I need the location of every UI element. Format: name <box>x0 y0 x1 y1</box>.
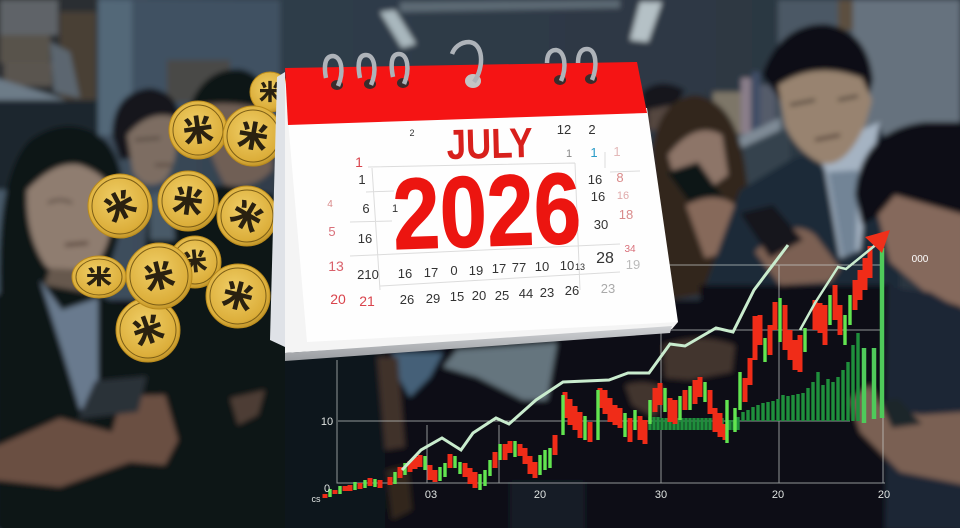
coin <box>250 72 290 112</box>
calendar dates: 10 <box>560 258 574 273</box>
calendar dates: 17 <box>424 265 438 280</box>
left shelves <box>0 0 100 190</box>
coin: 米 <box>95 178 143 231</box>
calendar dates: 15 <box>450 289 464 304</box>
secondary trend line <box>800 243 878 330</box>
chart: candlestick price chart <box>312 230 929 504</box>
axis labels: 20 <box>534 489 546 501</box>
coin <box>169 236 221 288</box>
lower page <box>285 80 678 353</box>
axis labels: 10 <box>321 416 333 428</box>
calendar dates: 16 <box>617 190 629 202</box>
axis labels: 20 <box>772 489 784 501</box>
calendar dates: 30 <box>594 217 608 232</box>
coin <box>72 256 126 298</box>
coin <box>223 106 283 166</box>
desk calendar <box>270 42 678 361</box>
wall box <box>167 60 230 102</box>
coin <box>169 101 227 159</box>
calendar dates: 21 <box>359 293 375 309</box>
calendar dates: 1 <box>590 145 598 160</box>
coin: 米 <box>139 249 178 299</box>
calendar dates: 1 <box>355 154 363 170</box>
axis labels: 0 <box>324 483 330 495</box>
centre hands <box>663 338 735 380</box>
person: back woman <box>112 88 181 184</box>
coin: 米 <box>180 104 216 152</box>
person: right man <box>700 24 900 528</box>
ceiling lights <box>380 10 416 48</box>
calendar dates: 13 <box>328 258 344 274</box>
calendar dates <box>327 122 640 309</box>
calendar dates: 1 <box>392 203 398 215</box>
coin: 米 <box>86 261 112 290</box>
calendar dates: 16 <box>358 231 372 246</box>
calendar dates: 20 <box>330 291 346 307</box>
calendar dates: 13 <box>575 262 585 272</box>
bookshelf <box>713 72 790 190</box>
calendar dates: 34 <box>624 244 636 255</box>
faint calendar grid <box>350 152 640 290</box>
calendar dates: 1 <box>358 172 366 187</box>
calendar dates: 26 <box>400 292 414 307</box>
coin <box>116 298 180 362</box>
calendar dates: 1 <box>613 144 621 159</box>
page stack edge <box>285 326 672 361</box>
calendar dates: 16 <box>398 266 412 281</box>
back wall left <box>98 0 280 135</box>
calendar dates: 44 <box>519 286 533 301</box>
calendar dates: 17 <box>492 261 506 276</box>
coin: 米 <box>181 241 209 278</box>
hands <box>0 395 178 487</box>
back page strip <box>270 72 285 347</box>
coin <box>206 264 270 328</box>
dark lower crowd <box>0 300 960 528</box>
axis labels: 000 <box>912 254 929 265</box>
coin: 米 <box>170 175 206 223</box>
green candles <box>330 295 850 497</box>
tall bright green bars <box>864 248 882 423</box>
calendar dates: 12 <box>557 122 571 137</box>
suit <box>0 285 200 528</box>
red candles <box>325 246 870 498</box>
coin: 米 <box>259 75 281 107</box>
calendar dates: 28 <box>596 250 614 267</box>
person: long-hair woman <box>642 83 750 300</box>
calendar dates: 20 <box>472 288 486 303</box>
calendar dates: 6 <box>362 201 370 216</box>
calendar dates: 0 <box>450 263 458 278</box>
green volume bars <box>650 333 858 430</box>
axis labels: cs <box>312 494 321 504</box>
calendar dates: 19 <box>469 263 483 278</box>
calendar dates: 23 <box>540 285 554 300</box>
price trend line <box>402 245 788 470</box>
gold coins <box>72 72 290 362</box>
axis labels <box>312 254 929 504</box>
calendar dates: 26 <box>565 283 579 298</box>
calendar dates: 4 <box>327 199 333 210</box>
calendar dates: 18 <box>619 207 633 222</box>
calendar dates: 10 <box>535 259 549 274</box>
arrow head <box>865 230 890 253</box>
forearm patch <box>230 390 265 425</box>
calendar dates: 19 <box>626 257 640 272</box>
calendar dates: 23 <box>601 281 615 296</box>
month title: JULY <box>446 119 533 168</box>
calendar dates: 25 <box>495 288 509 303</box>
calendar dates: 16 <box>591 189 605 204</box>
coin <box>88 174 152 238</box>
year title: 2026 <box>391 153 583 271</box>
axis labels: 30 <box>655 489 667 501</box>
white page <box>288 108 678 342</box>
axis labels: 20 <box>878 489 890 501</box>
person: centre <box>377 343 585 528</box>
calendar dates: 77 <box>512 260 526 275</box>
coin: 米 <box>219 269 258 319</box>
axis labels: 03 <box>425 489 437 501</box>
calendar dates: 8 <box>616 170 624 185</box>
person: back man <box>140 69 285 528</box>
calendar dates: 2 <box>409 128 415 138</box>
calendar dates: 210 <box>357 267 379 282</box>
coin <box>126 243 192 309</box>
coin <box>158 171 218 231</box>
person: lower-right man <box>850 122 960 528</box>
calendar dates: 16 <box>588 172 602 187</box>
calendar dates: 29 <box>426 291 440 306</box>
calendar dates: 1 <box>566 148 572 160</box>
shirt <box>40 280 98 410</box>
spiral rings <box>325 42 597 90</box>
coin: 米 <box>126 302 169 354</box>
chart grid and axes <box>337 265 885 483</box>
person: left woman <box>0 126 200 528</box>
phone <box>78 376 147 419</box>
coin: 米 <box>235 110 272 158</box>
coin: 米 <box>224 188 272 241</box>
calendar dates: 5 <box>328 224 336 239</box>
right wall <box>778 0 960 135</box>
red header <box>285 62 647 125</box>
calendar dates: 2 <box>588 122 596 137</box>
